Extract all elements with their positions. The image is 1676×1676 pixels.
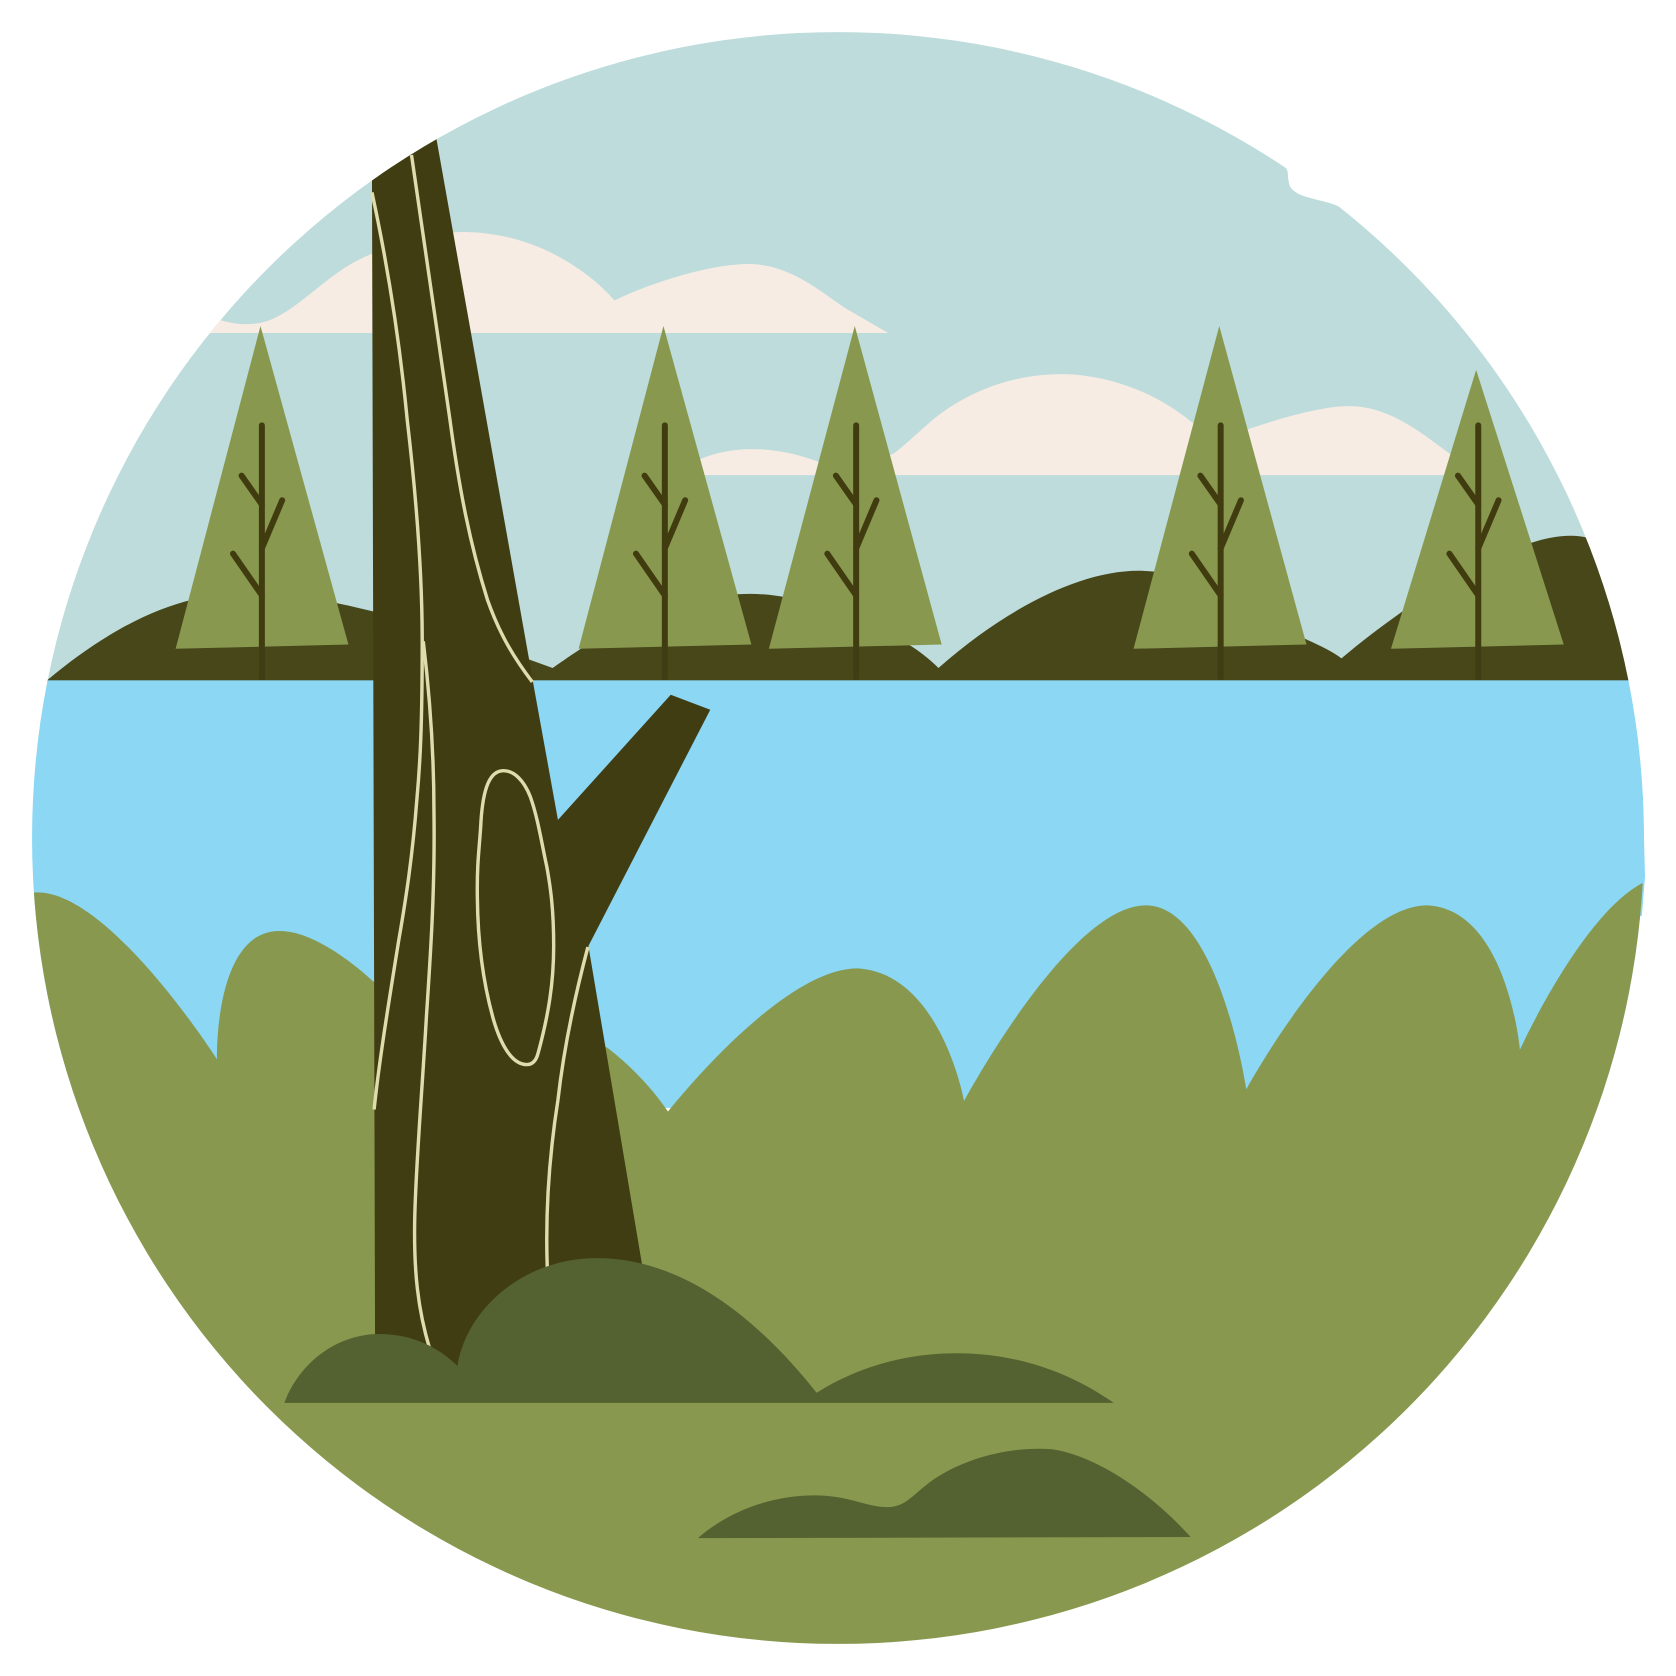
bushes at trunk base	[284, 1258, 1114, 1403]
tree 3	[769, 326, 942, 680]
tree 1 canopy	[176, 326, 348, 649]
tree 4 canopy	[1134, 326, 1306, 649]
lower bush	[698, 1449, 1191, 1538]
tree 2 trunk and branches	[636, 425, 685, 680]
tree 4	[1134, 326, 1306, 680]
tree 5 canopy	[1391, 370, 1564, 649]
cloud: upper left	[192, 232, 888, 333]
tree 1 trunk and branches	[233, 425, 282, 680]
sky	[0, 0, 1676, 748]
tree 3 trunk and branches	[827, 425, 876, 680]
dead tree trunk	[372, 137, 710, 1390]
tree 4 trunk and branches	[1192, 425, 1241, 680]
cloud: right	[695, 374, 1466, 475]
tree 5 trunk and branches	[1449, 425, 1499, 680]
tree 3 canopy	[769, 326, 942, 649]
tree 5	[1391, 370, 1564, 680]
water edge sliver	[1630, 748, 1645, 916]
water	[0, 680, 1676, 1108]
notch in circle edge	[1281, 107, 1390, 210]
tree 1	[176, 326, 348, 680]
foreground marsh	[0, 883, 1676, 1676]
trunk knot	[477, 771, 554, 1065]
trunk shape	[372, 137, 710, 1390]
tree 2 canopy	[579, 326, 751, 649]
bark lines	[372, 155, 588, 1349]
distant hills	[47, 536, 1667, 684]
tree 2	[579, 326, 751, 680]
